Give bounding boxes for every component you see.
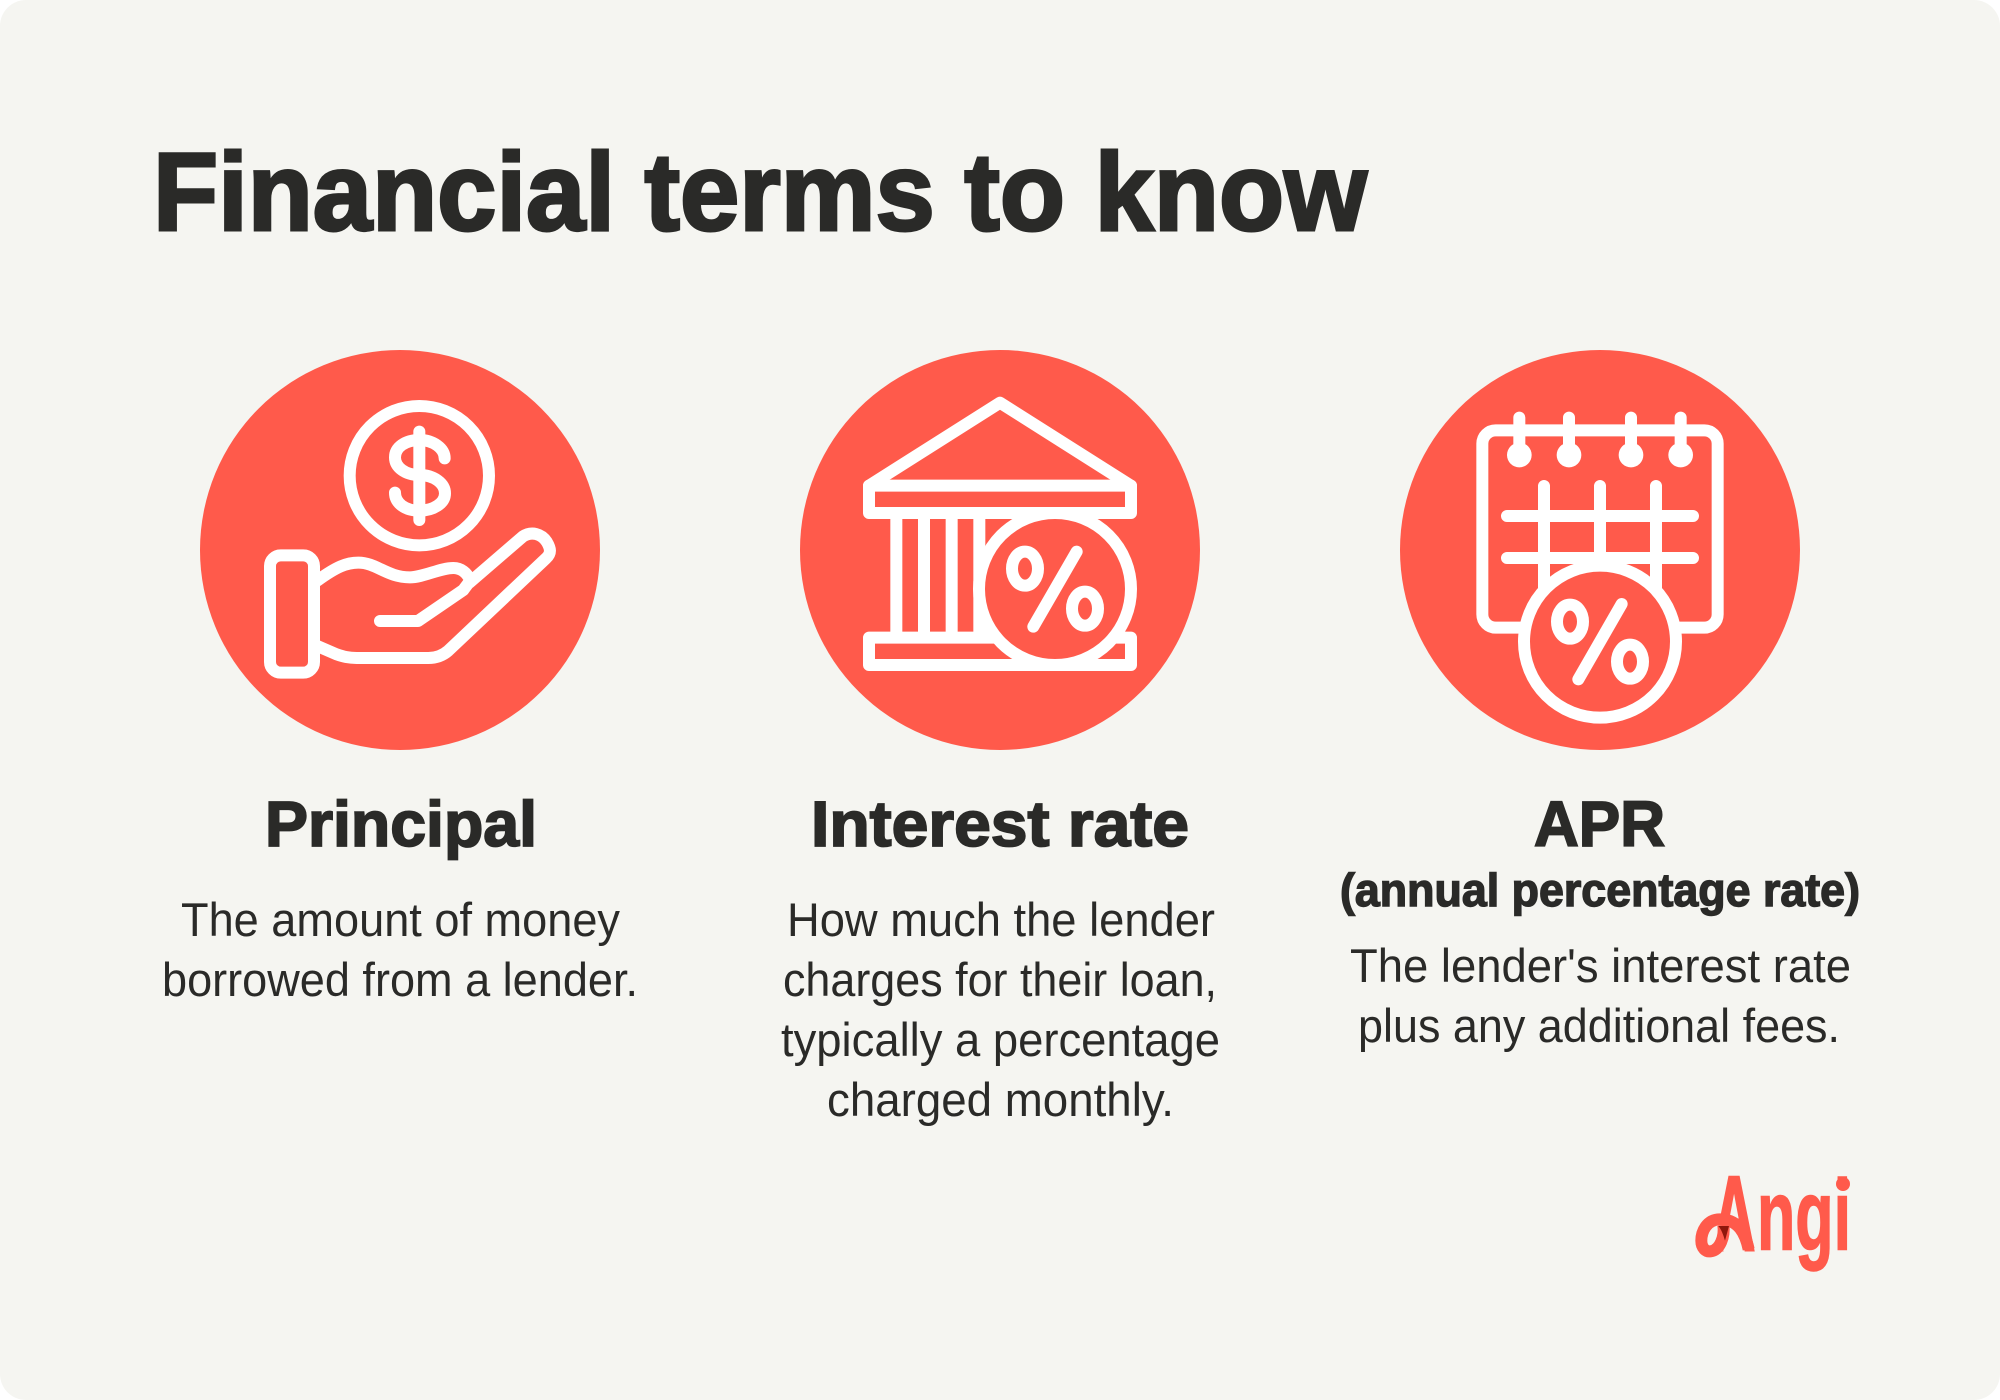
panel: interest rate — [781, 350, 1220, 1126]
heading: principal: Principal — [265, 788, 537, 860]
description: APR: plus any additional fees. — [1358, 999, 1840, 1052]
description: principal: The amount of money — [181, 893, 620, 946]
panel: principal — [162, 350, 638, 1006]
icon: calendar with percent coin — [1400, 350, 1800, 750]
heading: APR: APR — [1534, 788, 1665, 860]
description: interest rate: charges for their loan, — [783, 953, 1217, 1006]
icon: bank with percent coin — [800, 350, 1200, 750]
description: APR: The lender's interest rate — [1350, 939, 1851, 992]
description: principal — [162, 893, 638, 1006]
panel: APR — [1340, 350, 1860, 1052]
description: interest rate: typically a percentage — [781, 1013, 1220, 1066]
subheading: annual percentage rate: (annual percentage rate) — [1340, 864, 1860, 916]
description: APR — [1350, 939, 1851, 1052]
description: principal: borrowed from a lender. — [162, 953, 638, 1006]
heading: interest rate: Interest rate — [811, 788, 1189, 860]
title: Financial terms to know — [153, 131, 1367, 254]
icon: hand holding dollar coin — [200, 350, 600, 750]
logo: Angi: ngi — [1757, 1160, 1851, 1272]
logo: Angi — [1693, 1156, 1851, 1274]
description: interest rate: How much the lender — [787, 893, 1215, 946]
description: interest rate: charged monthly. — [827, 1073, 1174, 1126]
logo: Angi: A — [1713, 1156, 1755, 1274]
description: interest rate — [781, 893, 1220, 1126]
